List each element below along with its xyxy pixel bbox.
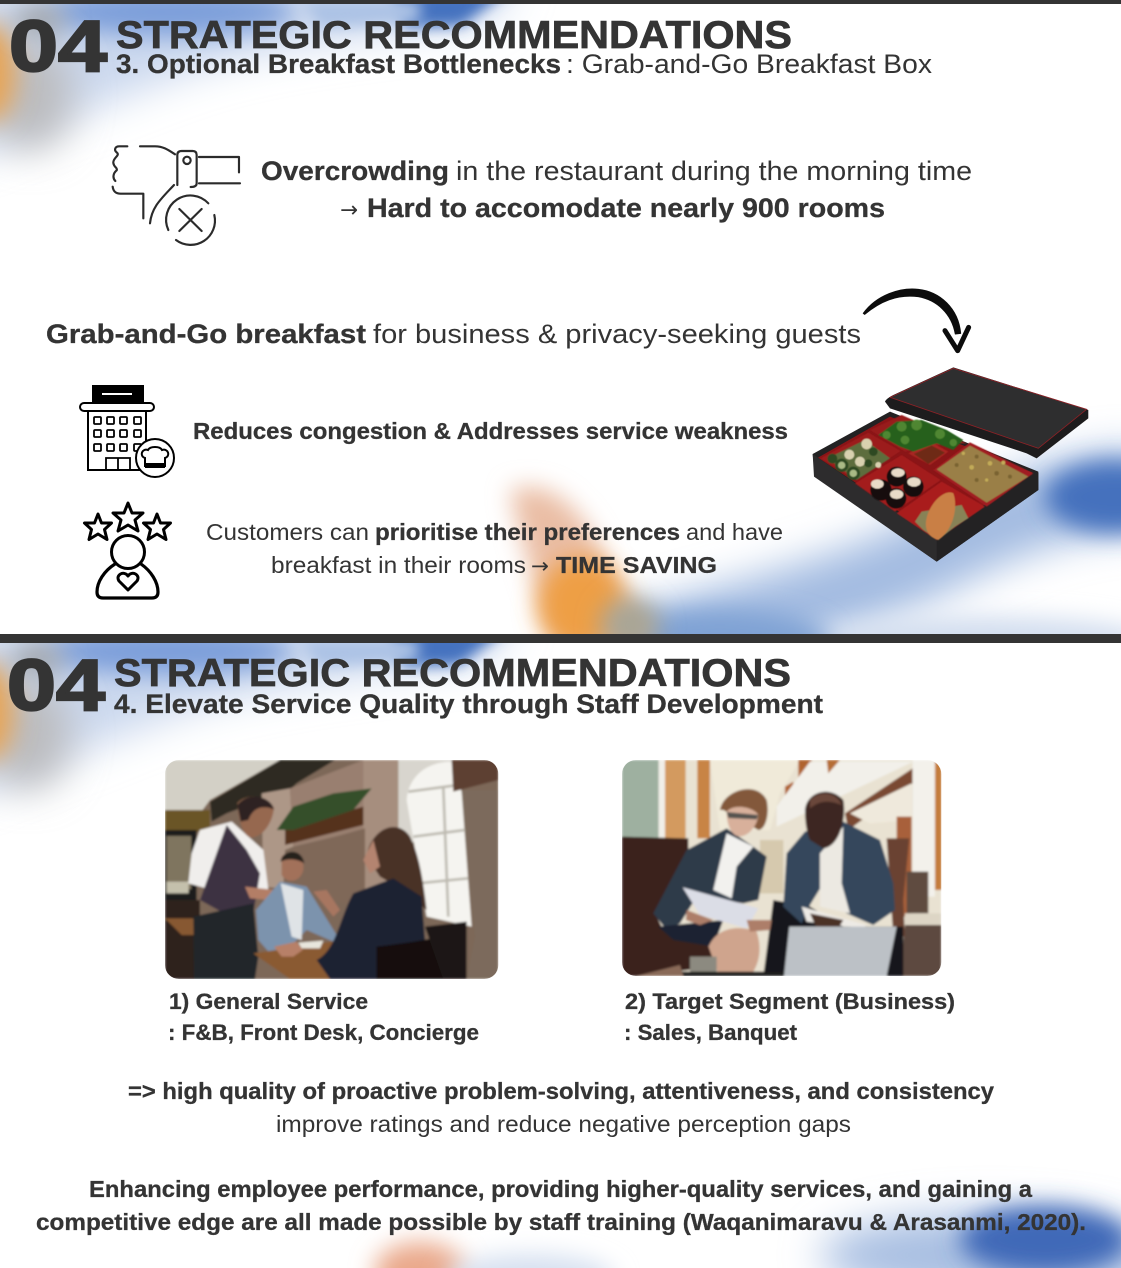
text: overcrowding: Overcrowding: [261, 156, 449, 186]
text: grab-and-go breakfast: for business & privacy-seeking guests: [373, 319, 861, 349]
caption: target segment: [624, 989, 955, 1045]
text: hard to accommodate: Hard to accomodate nearly 900 rooms: [367, 193, 885, 223]
subheading: optional breakfast bottlenecks: [116, 49, 932, 79]
caption: target segment: : Sales, Banquet: [624, 1020, 797, 1045]
text: customers can prioritise: [206, 519, 783, 545]
text: closing citation: competitive edge are all made possible by staff training (Waqanimaravu & Arasanmi, 2020).: [36, 1209, 1086, 1235]
subheading: optional breakfast bottlenecks: 3. Optional Breakfast Bottlenecks: [116, 49, 561, 79]
caption: target segment: 2) Target Segment (Business): [625, 989, 955, 1014]
image: bento box: [813, 367, 1088, 562]
text: reduces congestion: Reduces congestion & Addresses service weakness: [193, 418, 788, 444]
text: overcrowding: in the restaurant during the morning time: [456, 156, 972, 186]
heading: strategic recommendations (upper): STRATEGIC RECOMMENDATIONS: [116, 14, 792, 57]
subheading: optional breakfast bottlenecks: : Grab-and-Go Breakfast Box: [566, 49, 932, 79]
icon: hotel with chef hat: [80, 385, 174, 477]
caption: general service: : F&B, Front Desk, Concierge: [168, 1020, 479, 1045]
text: high quality outcome: => high quality of proactive problem-solving, attentiveness, and consistency: [128, 1078, 994, 1104]
text: customers can prioritise: Customers can: [206, 519, 369, 545]
photo: waiter serving guests in restaurant: [165, 760, 498, 979]
divider bar: [0, 634, 1121, 643]
background gradient: upper section: [0, 0, 1121, 670]
text: customers can prioritise: prioritise their preferences: [375, 519, 680, 545]
text: grab-and-go breakfast: Grab-and-Go breakfast: [46, 319, 366, 349]
caption: general service: [168, 989, 479, 1045]
top bar: [0, 0, 1121, 4]
caption: general service: 1) General Service: [169, 989, 368, 1014]
text: grab-and-go breakfast: [46, 319, 861, 349]
text: hard to accommodate: →: [340, 198, 358, 223]
text: time saving: [271, 552, 717, 578]
text: overcrowding: [261, 156, 972, 186]
heading: strategic recommendations (lower): STRATEGIC RECOMMENDATIONS: [114, 652, 791, 695]
text: time saving: breakfast in their rooms: [271, 552, 526, 578]
icon: thumbs down with cross: [113, 146, 240, 245]
icon: guest with stars and heart: [84, 503, 170, 598]
text: closing citation: Enhancing employee performance, providing higher-quality services, and gaining a: [89, 1176, 1032, 1202]
arrow: curved to bento box: [863, 289, 969, 351]
section number: 04 (lower): 04: [7, 646, 105, 726]
text: customers can prioritise: and have: [686, 519, 783, 545]
background gradient: lower section: [0, 619, 1121, 1268]
text: improve ratings: improve ratings and reduce negative perception gaps: [276, 1111, 851, 1137]
text: time saving: TIME SAVING: [556, 552, 717, 578]
section number: 04 (upper): 04: [9, 7, 107, 87]
text: time saving: →: [531, 554, 549, 578]
photo: business colleagues reviewing documents: [622, 760, 942, 976]
subheading: elevate service quality: 4. Elevate Service Quality through Staff Development: [114, 689, 823, 719]
text: closing citation: [36, 1176, 1086, 1235]
